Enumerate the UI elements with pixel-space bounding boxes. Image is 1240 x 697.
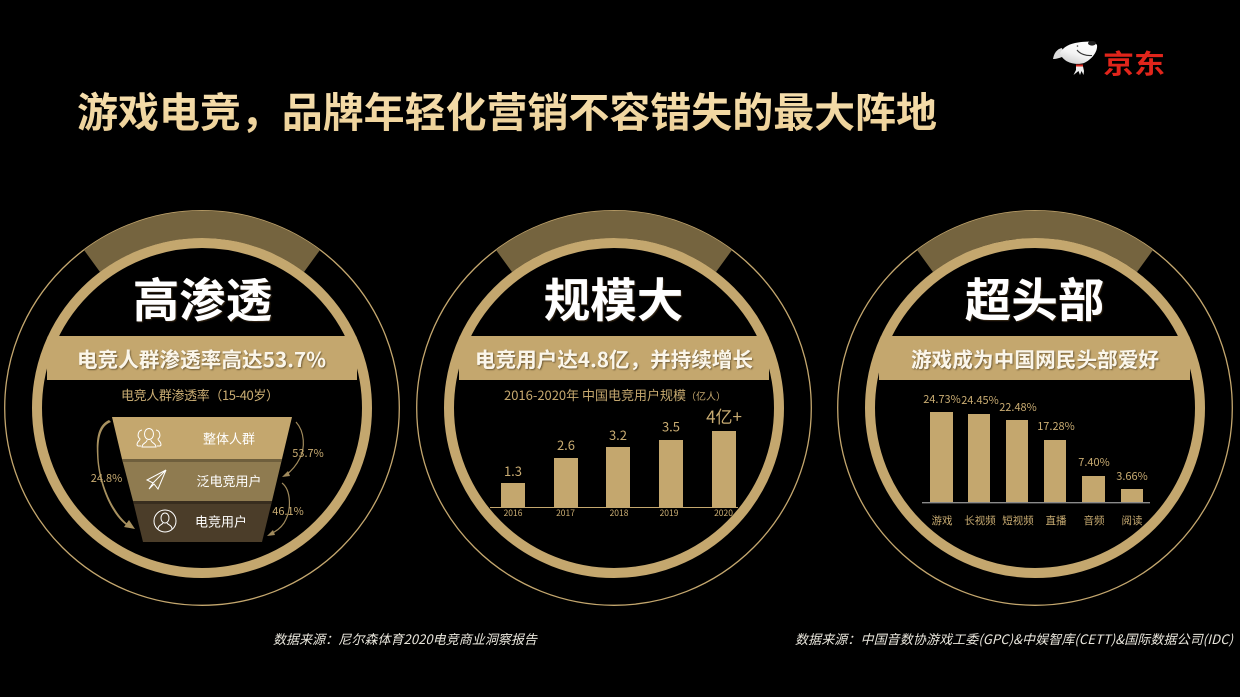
- bar chart: esports users: 3.5: [662, 416, 680, 436]
- chart subtitle: 2016-2020年 中国电竞用户规模（亿人）: [504, 385, 726, 404]
- bar chart: leisure preferences: 游戏: [932, 513, 953, 528]
- bar chart: esports users: 4亿+: [706, 403, 742, 428]
- arrow: 53.7%: 53.7%: [292, 445, 324, 461]
- panel: 超头部: [838, 211, 1232, 605]
- band text: 电竞人群渗透率高达53.7%: [77, 343, 326, 373]
- bar chart: leisure preferences: 长视频: [964, 513, 996, 528]
- panel: 高渗透: [5, 211, 399, 605]
- heading: 高渗透: [133, 264, 272, 331]
- bar chart: esports users: 2018: [610, 507, 629, 519]
- bar chart: esports users: 2020: [714, 507, 733, 519]
- source note right: 数据来源：中国音数协游戏工委(GPC)&中娱智库(CETT)&国际数据公司(IDC): [795, 629, 1234, 648]
- bar chart: esports users: [490, 403, 742, 519]
- icon: paper plane: [147, 470, 166, 489]
- funnel chart: [112, 417, 292, 542]
- arrow: 46.1%: 46.1%: [272, 503, 304, 519]
- logo: JD dog and wordmark: [1053, 41, 1165, 82]
- bar chart: leisure preferences: 24.45%: [961, 392, 999, 408]
- bar chart: esports users: 1.3: [504, 461, 522, 480]
- source note left: 数据来源：尼尔森体育2020电竞商业洞察报告: [273, 629, 538, 648]
- bar chart: esports users: 2019: [660, 507, 679, 519]
- wordmark: 京东: [1103, 43, 1165, 82]
- heading: 规模大: [544, 264, 683, 331]
- circular frame: [5, 211, 399, 605]
- bar chart: leisure preferences: 17.28%: [1037, 418, 1075, 434]
- panel: 规模大: [417, 211, 811, 605]
- band text: 游戏成为中国网民头部爱好: [911, 343, 1159, 373]
- arrow: 53.7%: [282, 422, 324, 477]
- funnel chart: 电竞用户: [195, 512, 247, 530]
- band text: 电竞用户达4.8亿，并持续增长: [475, 343, 753, 373]
- bar chart: leisure preferences: 24.73%: [923, 391, 961, 407]
- bar chart: leisure preferences: 7.40%: [1078, 454, 1110, 470]
- bar chart: esports users: 2017: [556, 507, 575, 519]
- bar chart: leisure preferences: 短视频: [1002, 513, 1034, 528]
- circular frame: [838, 211, 1232, 605]
- funnel labels: 整体人群: [203, 428, 255, 448]
- heading: 超头部: [965, 264, 1104, 331]
- circular frame: [417, 211, 811, 605]
- icon: user: [154, 510, 176, 532]
- title: 游戏电竞，品牌年轻化营销不容错失的最大阵地: [77, 79, 937, 139]
- icon: JD dog mascot: [1053, 41, 1097, 75]
- arrow: 46.1%: [267, 483, 304, 536]
- bar chart: leisure preferences: 音频: [1084, 513, 1105, 528]
- bar chart: leisure preferences: 阅读: [1122, 513, 1143, 528]
- bar chart: leisure preferences: [922, 391, 1150, 528]
- bar chart: leisure preferences: 直播: [1046, 513, 1067, 528]
- bar chart: esports users: 3.2: [609, 425, 627, 444]
- bar chart: esports users: 2.6: [557, 435, 575, 454]
- chart subtitle: 电竞人群渗透率（15-40岁）: [121, 385, 279, 404]
- arrow: 24.8%: 24.8%: [91, 470, 122, 486]
- funnel chart: 泛电竞用户: [196, 471, 262, 490]
- bar chart: leisure preferences: 22.48%: [999, 399, 1037, 415]
- icon: people: [137, 428, 161, 447]
- arrow: 24.8%: [91, 420, 135, 529]
- bar chart: leisure preferences: 3.66%: [1116, 468, 1148, 484]
- bar chart: esports users: 2016: [504, 507, 523, 519]
